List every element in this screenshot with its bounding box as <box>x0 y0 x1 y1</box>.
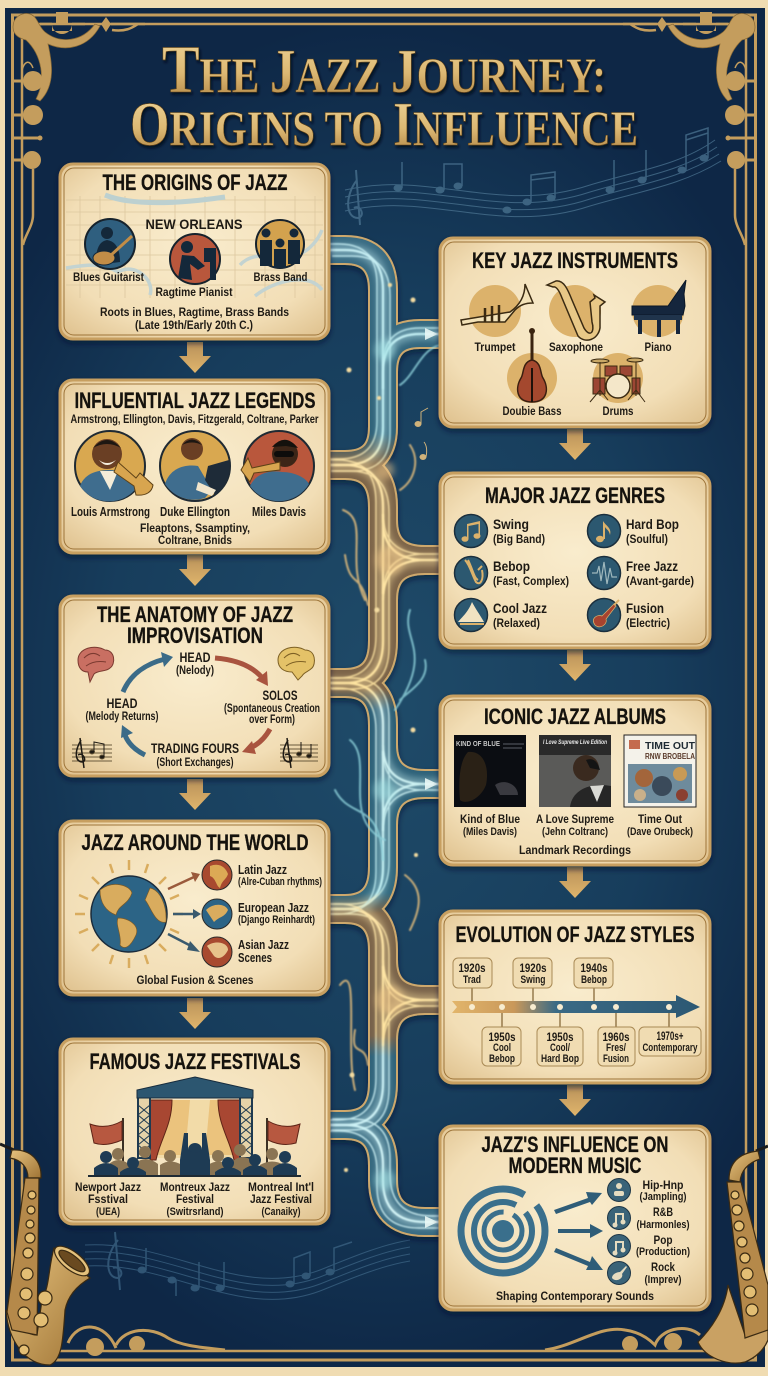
panel: anatomy of jazz improvisation <box>60 596 329 776</box>
heading: FAMOUS JAZZ FESTIVALS <box>90 1049 300 1074</box>
cycle labels: (Melody Returns) <box>86 709 158 723</box>
subheading: Armstrong, Ellington, Davis, Fitzgerald, Coltrane, Parker <box>70 412 319 426</box>
labels: Doubie Bass <box>502 404 562 418</box>
labels <box>502 404 634 418</box>
album: Kind of Blue: KIND OF BLUE <box>456 741 500 748</box>
timeline boxes <box>453 958 701 1066</box>
frame corner top left <box>11 12 384 245</box>
genre labels: Swing <box>493 516 529 532</box>
festival labels: Montreux Jazz <box>160 1180 230 1194</box>
festival labels: Jazz Festival <box>250 1192 312 1206</box>
map labels: Brass Band <box>254 270 308 284</box>
genre icons <box>454 514 620 632</box>
heading: MAJOR JAZZ GENRES <box>485 483 665 508</box>
icon: gold brain <box>278 647 314 680</box>
genre labels: Rock <box>651 1260 675 1274</box>
heading: new orleans: NEW ORLEANS <box>146 216 242 232</box>
genre labels: R&B <box>653 1205 673 1219</box>
floating notes <box>415 408 428 460</box>
caption: Fleaptons, Ssamptiny, <box>140 521 250 535</box>
genre labels: (Avant-garde) <box>626 574 694 588</box>
album labels: (Dave Orubeck) <box>627 826 693 838</box>
genre labels: (Relaxed) <box>493 616 540 630</box>
timeline boxes: 1920s <box>458 961 486 975</box>
heading: INFLUENTIAL JAZZ LEGENDS <box>74 388 316 413</box>
heading: THE ORIGINS OF JAZZ <box>102 170 288 195</box>
cycle labels: HEAD <box>106 695 138 711</box>
labels: Trumpet <box>474 340 516 354</box>
caption: Coltrane, Bnids <box>158 533 232 547</box>
album: Time Out <box>624 735 696 807</box>
panel: jazz around the world <box>60 821 329 995</box>
timeline boxes: Contemporary <box>642 1042 698 1054</box>
festival labels: Fsstival <box>88 1192 128 1206</box>
panel: evolution of jazz styles <box>440 911 710 1083</box>
album labels: A Love Supreme <box>536 812 614 826</box>
portrait: Louis Armstrong <box>75 431 153 501</box>
album: A Love Supreme: I Love Supreme Live Edition <box>543 739 607 746</box>
album: Kind of Blue <box>454 735 526 807</box>
genre labels: Hip-Hnp <box>642 1178 684 1192</box>
region globes <box>202 860 232 967</box>
timeline boxes: Swing <box>520 974 546 986</box>
caption <box>140 521 250 547</box>
caption <box>100 305 289 332</box>
heading: KEY JAZZ INSTRUMENTS <box>472 248 678 273</box>
timeline arrow <box>452 995 700 1018</box>
genre labels: Free Jazz <box>626 558 678 574</box>
genre labels: (Fast, Complex) <box>493 574 569 588</box>
panel: key jazz instruments <box>440 238 710 427</box>
title: THE JAZZ JOURNEY: <box>162 31 606 107</box>
festival labels: (Switrsrland) <box>166 1206 224 1218</box>
stream glow at junctions <box>374 340 404 1190</box>
timeline boxes: 1920s <box>520 961 547 975</box>
cycle labels: (Nelody) <box>176 663 214 677</box>
album labels: (Jehn Coltranc) <box>542 826 608 838</box>
heading: JAZZ AROUND THE WORLD <box>82 830 308 855</box>
labels: Drums <box>602 404 634 418</box>
genre icons <box>608 1178 630 1284</box>
heading: IMPROVISATION <box>127 623 263 648</box>
genre labels: (Imprev) <box>644 1274 682 1286</box>
illustration: festival stage <box>88 1077 301 1176</box>
panel: major jazz genres <box>440 473 710 648</box>
festival labels <box>75 1180 314 1218</box>
cycle labels: (Spontaneous Creation <box>224 701 320 715</box>
caption: Shaping Contemporary Sounds <box>496 1289 654 1303</box>
down arrows between panels <box>179 342 591 1116</box>
crowd <box>108 1144 284 1175</box>
icon: brass band <box>256 220 304 268</box>
panel: the origins of jazz <box>60 164 329 339</box>
region labels <box>238 862 322 965</box>
timeline boxes: Bebop <box>489 1053 515 1065</box>
icon: saxophone <box>547 281 605 340</box>
timeline boxes: 1950s <box>488 1030 516 1044</box>
cycle labels: HEAD <box>180 649 210 665</box>
genre labels: Fusion <box>626 600 664 616</box>
festival labels: Festival <box>176 1192 214 1206</box>
flow streams: central conduit network <box>318 244 452 1228</box>
icon: trumpet <box>461 284 533 337</box>
icon: staff right <box>280 738 318 768</box>
saxophone right <box>698 1146 768 1363</box>
album labels: (Miles Davis) <box>463 826 517 838</box>
decorative music staff top <box>345 128 721 225</box>
region labels: (Alre-Cuban rhythms) <box>238 876 322 888</box>
heading: MODERN MUSIC <box>508 1153 642 1178</box>
labels: Saxophone <box>549 340 603 354</box>
icon: staff left <box>72 738 112 768</box>
map of new orleans <box>66 195 323 298</box>
labels <box>474 340 672 354</box>
genre labels: (Electric) <box>626 616 670 630</box>
sparkles in stream <box>344 283 418 1172</box>
names: Miles Davis <box>252 504 306 519</box>
cycle labels <box>86 649 320 769</box>
genre labels <box>493 516 694 630</box>
arrows to regions <box>168 872 201 952</box>
festival labels: (UEA) <box>96 1206 120 1218</box>
cycle labels: TRADING FOURS <box>151 740 239 756</box>
caption: Global Fusion & Scenes <box>136 973 254 987</box>
album: Time Out: RNW BROBELA <box>645 752 695 761</box>
influence arrows <box>554 1192 603 1270</box>
saxophone left <box>0 1144 94 1365</box>
genre labels: (Soulful) <box>626 532 668 546</box>
connectors <box>472 988 669 1027</box>
genre labels: (Harmonles) <box>636 1219 690 1231</box>
title <box>130 31 638 159</box>
album: A Love Supreme <box>539 735 611 807</box>
heading <box>482 1132 668 1178</box>
caption: Landmark Recordings <box>519 843 631 857</box>
cycle labels: (Short Exchanges) <box>156 755 234 769</box>
labels: Piano <box>644 340 672 354</box>
caption: (Late 19th/Early 20th C.) <box>135 318 253 332</box>
map labels <box>73 270 308 299</box>
region labels: Latin Jazz <box>238 862 287 877</box>
genre labels: (Production) <box>636 1246 690 1258</box>
icon: blues guitarist <box>85 219 135 269</box>
icon: red brain <box>78 647 114 682</box>
genre labels: Pop <box>654 1233 672 1247</box>
panel: iconic jazz albums <box>440 696 710 865</box>
genre labels: Cool Jazz <box>493 600 547 616</box>
timeline boxes: Bebop <box>581 974 607 986</box>
icon: ragtime pianist <box>170 234 220 284</box>
region labels: European Jazz <box>238 900 309 915</box>
region labels: Scenes <box>238 950 272 965</box>
icon: concentric record <box>461 1189 545 1273</box>
heading: EVOLUTION OF JAZZ STYLES <box>456 922 694 947</box>
album labels: Kind of Blue <box>460 812 520 826</box>
globe with sun rays <box>75 860 183 968</box>
stream wisps <box>335 345 440 1090</box>
icon: drums <box>590 353 645 403</box>
names <box>71 504 306 519</box>
timeline boxes: 1950s <box>546 1030 574 1044</box>
album labels: Time Out <box>638 812 682 826</box>
flags <box>123 1118 267 1166</box>
icon: piano <box>632 280 686 337</box>
timeline boxes: Cool <box>493 1042 511 1054</box>
panel: influential jazz legends <box>60 380 329 553</box>
timeline boxes: 1970s+ <box>656 1029 684 1043</box>
heading: JAZZ'S INFLUENCE ON <box>482 1132 668 1157</box>
icon: double bass <box>507 328 557 403</box>
heading: ICONIC JAZZ ALBUMS <box>484 704 666 729</box>
timeline boxes: Fres/ <box>606 1042 626 1054</box>
cycle labels: over Form) <box>249 712 295 726</box>
heading: THE ANATOMY OF JAZZ <box>97 602 293 627</box>
timeline boxes: 1940s <box>580 961 608 975</box>
map labels: Blues Guitarist <box>73 270 144 284</box>
region labels: Asian Jazz <box>238 937 289 952</box>
portrait: Miles Davis <box>241 431 314 501</box>
genre labels <box>636 1178 690 1286</box>
genre labels: (Big Band) <box>493 532 545 546</box>
timeline boxes: 1960s <box>602 1030 630 1044</box>
cycle arrows <box>121 652 270 755</box>
region labels: (Django Reinhardt) <box>238 914 315 926</box>
festival labels: Montreal Int'l <box>248 1180 314 1194</box>
caption: Roots in Blues, Ragtime, Brass Bands <box>100 305 289 319</box>
festival labels: Newport Jazz <box>75 1180 141 1194</box>
panel: famous jazz festivals <box>60 1039 329 1224</box>
festival labels: (Canaiky) <box>262 1206 301 1218</box>
map labels: Ragtime Pianist <box>156 285 232 299</box>
timeline boxes: Trad <box>463 974 481 986</box>
cycle labels: SOLOS <box>262 687 298 703</box>
timeline boxes: Hard Bop <box>541 1053 579 1065</box>
heading <box>97 602 293 648</box>
panel: jazz's influence on modern music <box>440 1126 710 1310</box>
album: Time Out: TIME OUT <box>645 740 696 752</box>
names: Louis Armstrong <box>71 504 150 519</box>
frame corner top right <box>384 12 757 245</box>
genre labels: Bebop <box>493 558 530 574</box>
album labels <box>460 812 693 838</box>
frame ornaments bottom <box>68 1327 700 1356</box>
title: ORIGINS TO INFLUENCE <box>130 91 638 159</box>
timeline boxes: Fusion <box>603 1053 629 1065</box>
flow arrowheads <box>425 328 438 1228</box>
genre labels: Hard Bop <box>626 516 679 532</box>
decorative music staff bottom <box>85 1232 410 1299</box>
names: Duke Ellington <box>160 504 230 519</box>
timeline boxes: Cool/ <box>550 1042 570 1054</box>
portrait: Duke Ellington <box>160 431 230 501</box>
genre labels: (Jampling) <box>640 1191 687 1203</box>
